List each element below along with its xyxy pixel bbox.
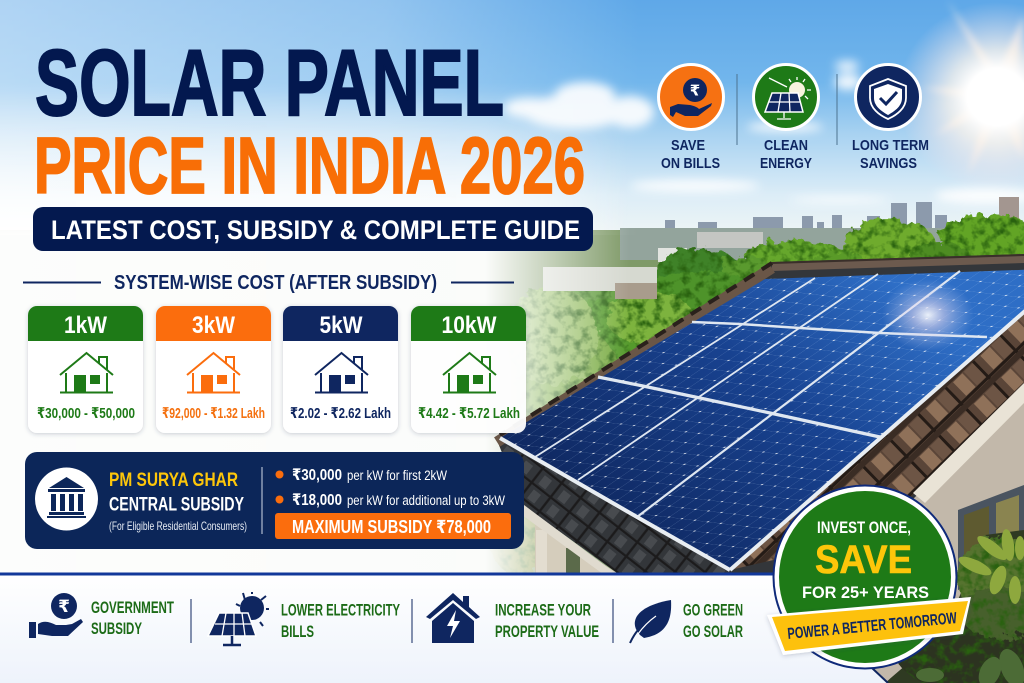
badge: invest once save: SAVE	[815, 538, 912, 582]
card: 1kW: 1kW	[64, 312, 107, 339]
badge: invest once save	[767, 484, 971, 670]
solar panel array	[500, 268, 1024, 570]
icon: house with bolt	[426, 593, 480, 643]
card: 3kW: 3kW	[192, 312, 235, 339]
feature: government subsidy: GOVERNMENT	[91, 599, 174, 617]
subsidy heading	[109, 469, 247, 533]
icon: solar panel and sun	[765, 77, 811, 119]
title: PRICE IN INDIA 2026	[34, 121, 585, 210]
icon: house	[187, 353, 240, 392]
subsidy rate lines: per kW for first 2kW	[347, 468, 447, 483]
icon: rupee hand: ₹	[58, 597, 70, 616]
benefit: long term savings: LONG TERM	[852, 137, 929, 154]
icon: solar panel with sun	[208, 592, 269, 645]
benefit: clean energy: ENERGY	[760, 155, 812, 172]
icon: house	[443, 353, 496, 392]
card: 1kW: ₹30,000 - ₹50,000	[37, 405, 135, 422]
section heading: SYSTEM-WISE COST (AFTER SUBSIDY)	[114, 272, 437, 294]
feature: government subsidy	[29, 593, 174, 638]
benefit: clean energy	[754, 64, 818, 172]
icon: government building	[35, 468, 98, 530]
icon: rupee hand	[29, 593, 83, 638]
feature: government subsidy: SUBSIDY	[91, 620, 142, 638]
title: SOLAR PANEL	[35, 30, 504, 135]
subsidy heading: PM SURYA GHAR	[109, 469, 238, 491]
icon: house	[60, 353, 113, 392]
feature: go green go solar	[630, 600, 743, 643]
feature: lower electricity bills: LOWER ELECTRICITY	[281, 602, 400, 620]
icon: house	[315, 353, 368, 392]
icon: rupee coin on hand: ₹	[690, 82, 700, 100]
card: 5kW	[283, 306, 398, 433]
subsidy rate lines: ₹30,000	[292, 467, 342, 484]
benefit: long term savings: SAVINGS	[860, 155, 917, 172]
card: 5kW: ₹2.02 - ₹2.62 Lakh	[290, 405, 391, 422]
bottom white band	[0, 572, 888, 683]
card: 10kW: 10kW	[442, 312, 497, 339]
card: 5kW: 5kW	[320, 312, 363, 339]
feature: lower electricity bills	[208, 592, 400, 645]
card: 3kW	[156, 306, 271, 433]
benefit: save on bills	[658, 64, 724, 172]
feature: lower electricity bills: BILLS	[281, 623, 314, 641]
benefit: save on bills: ON BILLS	[661, 155, 720, 172]
trees	[490, 214, 1024, 576]
ribbon	[767, 597, 971, 655]
card: 1kW	[28, 306, 143, 433]
subsidy heading: CENTRAL SUBSIDY	[109, 494, 244, 516]
benefit: save on bills: SAVE	[671, 137, 705, 154]
card: 3kW: ₹92,000 - ₹1.32 Lakh	[162, 405, 265, 422]
foliage bottom right	[885, 528, 1024, 683]
title	[34, 30, 585, 210]
icon: shield with check	[870, 79, 906, 119]
subsidy rate lines: per kW for additional up to 3kW	[347, 493, 505, 508]
maximum subsidy bar	[275, 513, 511, 539]
subsidy rate lines: ₹18,000	[292, 492, 342, 509]
feature: go green go solar: GO SOLAR	[683, 623, 743, 641]
benefit: clean energy: CLEAN	[764, 137, 808, 154]
card: 10kW: ₹4.42 - ₹5.72 Lakh	[418, 405, 520, 422]
roof and house	[497, 254, 1024, 683]
feature: go green go solar: GO GREEN	[683, 602, 743, 620]
feature: increase property value: INCREASE YOUR	[495, 602, 591, 620]
subsidy heading: (For Eligible Residential Consumers)	[109, 519, 247, 533]
feature: increase property value: PROPERTY VALUE	[495, 623, 599, 641]
maximum subsidy bar: MAXIMUM SUBSIDY ₹78,000	[292, 517, 491, 537]
subtitle pill	[33, 207, 593, 251]
badge: invest once save: INVEST ONCE,	[817, 519, 911, 537]
badge: invest once save: FOR 25+ YEARS	[802, 583, 929, 602]
benefit: long term savings	[852, 64, 929, 172]
feature: increase property value	[426, 593, 599, 643]
card: 10kW	[411, 306, 526, 433]
subtitle pill: LATEST COST, SUBSIDY & COMPLETE GUIDE	[51, 215, 580, 245]
icon: leaf	[630, 600, 671, 643]
subsidy rate lines	[276, 467, 505, 509]
panel: PM Surya Ghar subsidy	[25, 452, 524, 549]
